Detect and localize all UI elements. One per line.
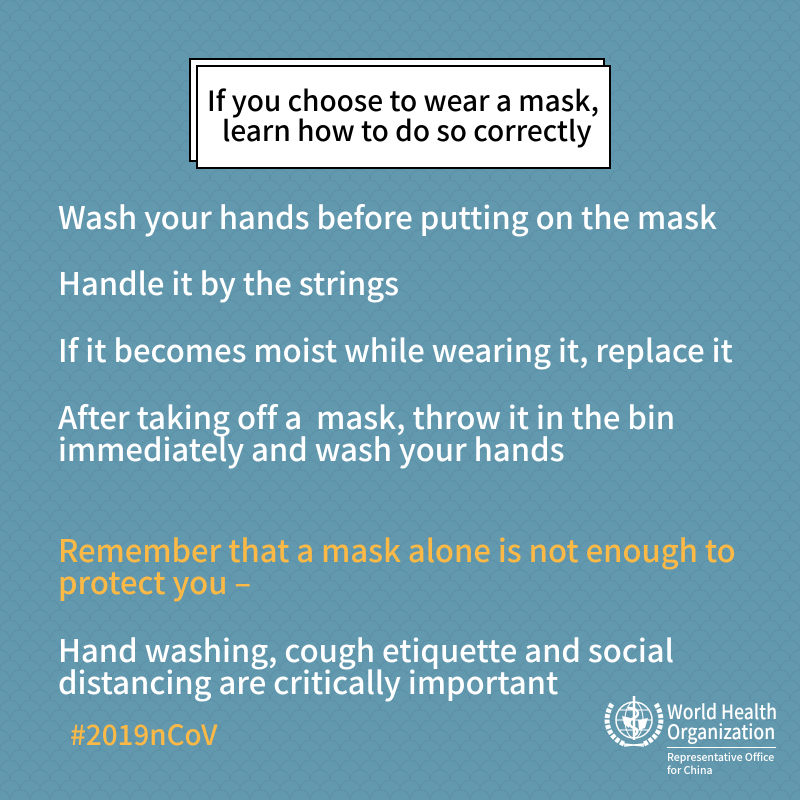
title: If you choose to wear a mask, learn how to do so correctly xyxy=(207,80,599,150)
icon: WHO emblem xyxy=(604,696,664,747)
text: strings: Handle it by the strings xyxy=(58,259,399,304)
text: moist: If it becomes moist while wearing it, replace it xyxy=(58,326,733,371)
title box xyxy=(189,58,611,169)
text: hand washing: Hand washing, cough etiquette and social distancing are critically important xyxy=(58,626,674,703)
logo text: World Health Organization: World Health Organization xyxy=(667,696,777,745)
text: taking off: After taking off a mask, throw it in the bin immediately and wash your hands xyxy=(58,393,675,470)
text: reminder: Remember that a mask alone is not enough to protect you – xyxy=(58,526,736,603)
logo text: World Health Organization xyxy=(667,696,777,778)
hashtag: #2019nCoV xyxy=(70,714,218,754)
text: wash hands: Wash your hands before putting on the mask xyxy=(58,193,717,238)
logo text: World Health Organization: Representative Office for China xyxy=(667,750,774,778)
